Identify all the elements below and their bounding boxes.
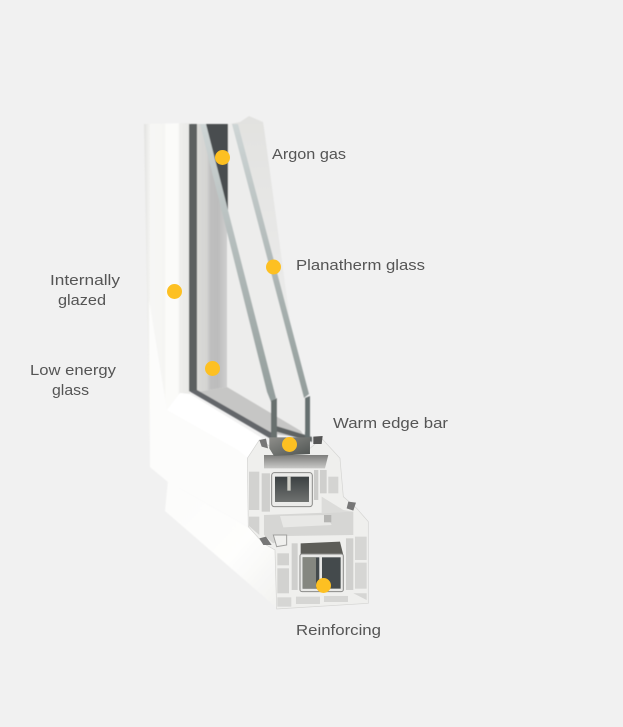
marker: warm edge bar (282, 437, 297, 452)
argon dark cavity (203, 124, 228, 213)
window frame cutaway (144, 116, 312, 608)
label: internally glazed (50, 272, 121, 309)
label: planatherm glass: Planatherm glass (296, 257, 425, 274)
label: low energy glass: glass (52, 382, 89, 399)
label: argon gas: Argon gas (272, 146, 346, 163)
dark spacer strip (189, 124, 197, 393)
lower sash outer side (165, 480, 277, 608)
rear glass pane (232, 124, 309, 398)
marker: reinforcing (316, 578, 331, 593)
inner glass shade band (197, 124, 227, 392)
label: low energy glass: Low energy (30, 362, 117, 379)
sill bevel (149, 300, 262, 527)
lower chambers (277, 553, 289, 565)
marker: planatherm glass (266, 260, 281, 274)
marker: internally glazed (167, 284, 182, 299)
chambers upper (249, 472, 259, 510)
lower reinforcing box (301, 542, 343, 558)
top chamber (264, 455, 328, 468)
frame cross section (247, 436, 368, 609)
middle channel (264, 512, 353, 543)
glazed reveal (197, 124, 306, 432)
upper reinforcing box (272, 473, 312, 507)
back right frame (230, 116, 300, 420)
label: low energy glass (30, 362, 117, 399)
front glass pane (200, 124, 276, 402)
label: internally glazed: Internally (50, 272, 121, 289)
back dark strip (271, 425, 312, 442)
marker: argon gas (215, 150, 230, 165)
label: internally glazed: glazed (58, 292, 106, 309)
marker: low energy glass (205, 361, 220, 376)
label: warm edge bar: Warm edge bar (333, 415, 448, 432)
profile body (247, 438, 368, 609)
left frame face (144, 123, 262, 527)
label: reinforcing: Reinforcing (296, 622, 381, 639)
glass holder (269, 437, 310, 456)
